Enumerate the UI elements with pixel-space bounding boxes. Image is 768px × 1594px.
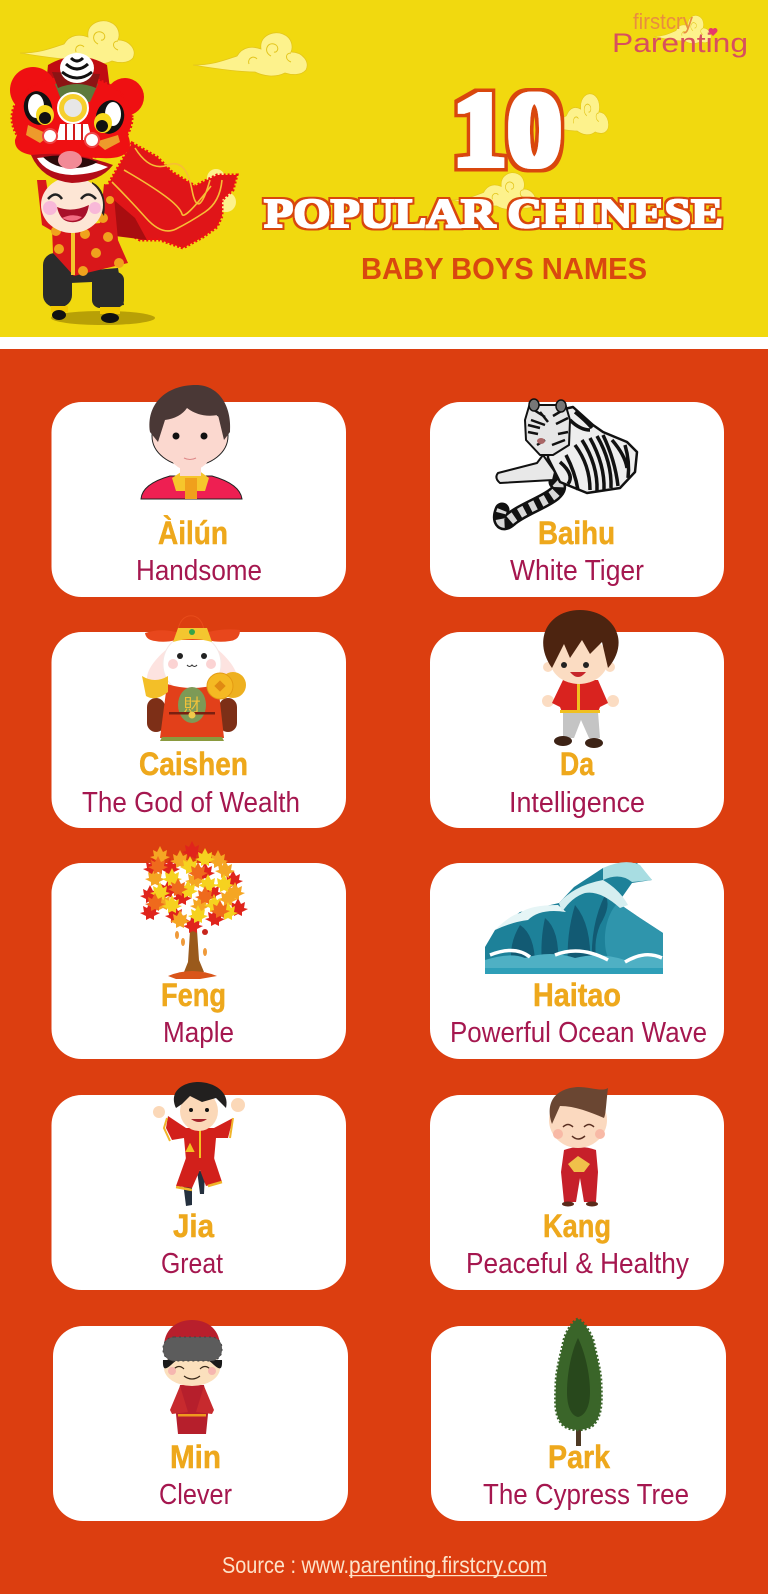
jacket [37, 180, 128, 276]
icon: cloud behind subtitle [451, 173, 535, 209]
meaning: White Tiger [510, 555, 644, 587]
card: Ailun [52, 385, 346, 597]
meaning: Maple [163, 1017, 234, 1049]
icon: man in red jacket [141, 385, 242, 499]
icon: cypress tree [556, 1319, 601, 1446]
card: Kang [430, 1087, 724, 1290]
panel: yellow header [0, 0, 768, 337]
boy face [41, 177, 105, 233]
source line: parenting.firstcry.com [349, 1552, 547, 1578]
icon: ocean wave [485, 862, 663, 974]
name: Kang [543, 1208, 611, 1244]
meaning: Powerful Ocean Wave [450, 1017, 707, 1049]
nose [56, 124, 92, 140]
shadow [51, 311, 155, 325]
eyes [20, 88, 56, 128]
name: Da [560, 746, 594, 782]
shoes [51, 306, 120, 323]
subtitle: BABY BOYS NAMES [361, 251, 647, 286]
icon: cloud behind 10 [540, 94, 608, 135]
icon: rabbit god of wealth: 財 [184, 696, 200, 715]
title: popular chinese: POPULAR CHINESE [264, 190, 723, 236]
name: Park [548, 1439, 610, 1475]
icon: rabbit god of wealth [142, 616, 246, 741]
lion cape [105, 143, 237, 248]
icon: cloud centre [193, 33, 307, 76]
name: Àilún [158, 515, 228, 551]
meaning: The Cypress Tree [483, 1479, 689, 1511]
pom-pom [60, 53, 94, 83]
icon: cloud left [20, 21, 134, 64]
name: Haitao [533, 977, 621, 1013]
icon: white tiger [496, 399, 637, 523]
icon: lion dance boy [10, 53, 237, 325]
card: Jia [52, 1082, 346, 1290]
card: Caishen [52, 616, 346, 828]
logo: firstcry parenting: Parenting [612, 28, 748, 58]
card: Haitao [430, 862, 724, 1059]
title: 10: 10 [452, 71, 562, 188]
icon: smiling boy in red suit [549, 1087, 608, 1206]
card: Baihu [430, 399, 724, 597]
icon: boy with fur hat [163, 1320, 222, 1434]
icon: cloud behind lion cape [207, 169, 236, 212]
card: Park [431, 1319, 726, 1521]
meaning: Handsome [136, 555, 262, 587]
source line [222, 1552, 547, 1578]
meaning: Great [161, 1248, 223, 1280]
icon: maple tree [140, 841, 248, 979]
meaning: Peaceful & Healthy [466, 1248, 690, 1280]
card: Min [53, 1320, 348, 1521]
trousers [43, 253, 124, 308]
name: Min [170, 1439, 221, 1475]
icon: jumping boy [153, 1082, 245, 1206]
card: Feng [52, 841, 346, 1059]
jewel [58, 93, 88, 123]
meaning: Clever [159, 1479, 232, 1511]
icon: boy in red shirt [542, 610, 619, 748]
panel: orange background [0, 349, 768, 1594]
name: Jia [173, 1208, 214, 1244]
logo: firstcry parenting [612, 9, 748, 58]
logo: firstcry parenting: firstcry [633, 9, 693, 34]
mouth [31, 154, 113, 183]
name: Caishen [139, 746, 248, 782]
name: Feng [161, 977, 226, 1013]
source line: Source : www. [222, 1552, 349, 1578]
white divider band [0, 337, 768, 349]
lion head [10, 53, 144, 183]
card: Da [430, 610, 724, 828]
meaning: The God of Wealth [82, 787, 300, 819]
meaning: Intelligence [509, 787, 645, 819]
name: Baihu [538, 515, 615, 551]
